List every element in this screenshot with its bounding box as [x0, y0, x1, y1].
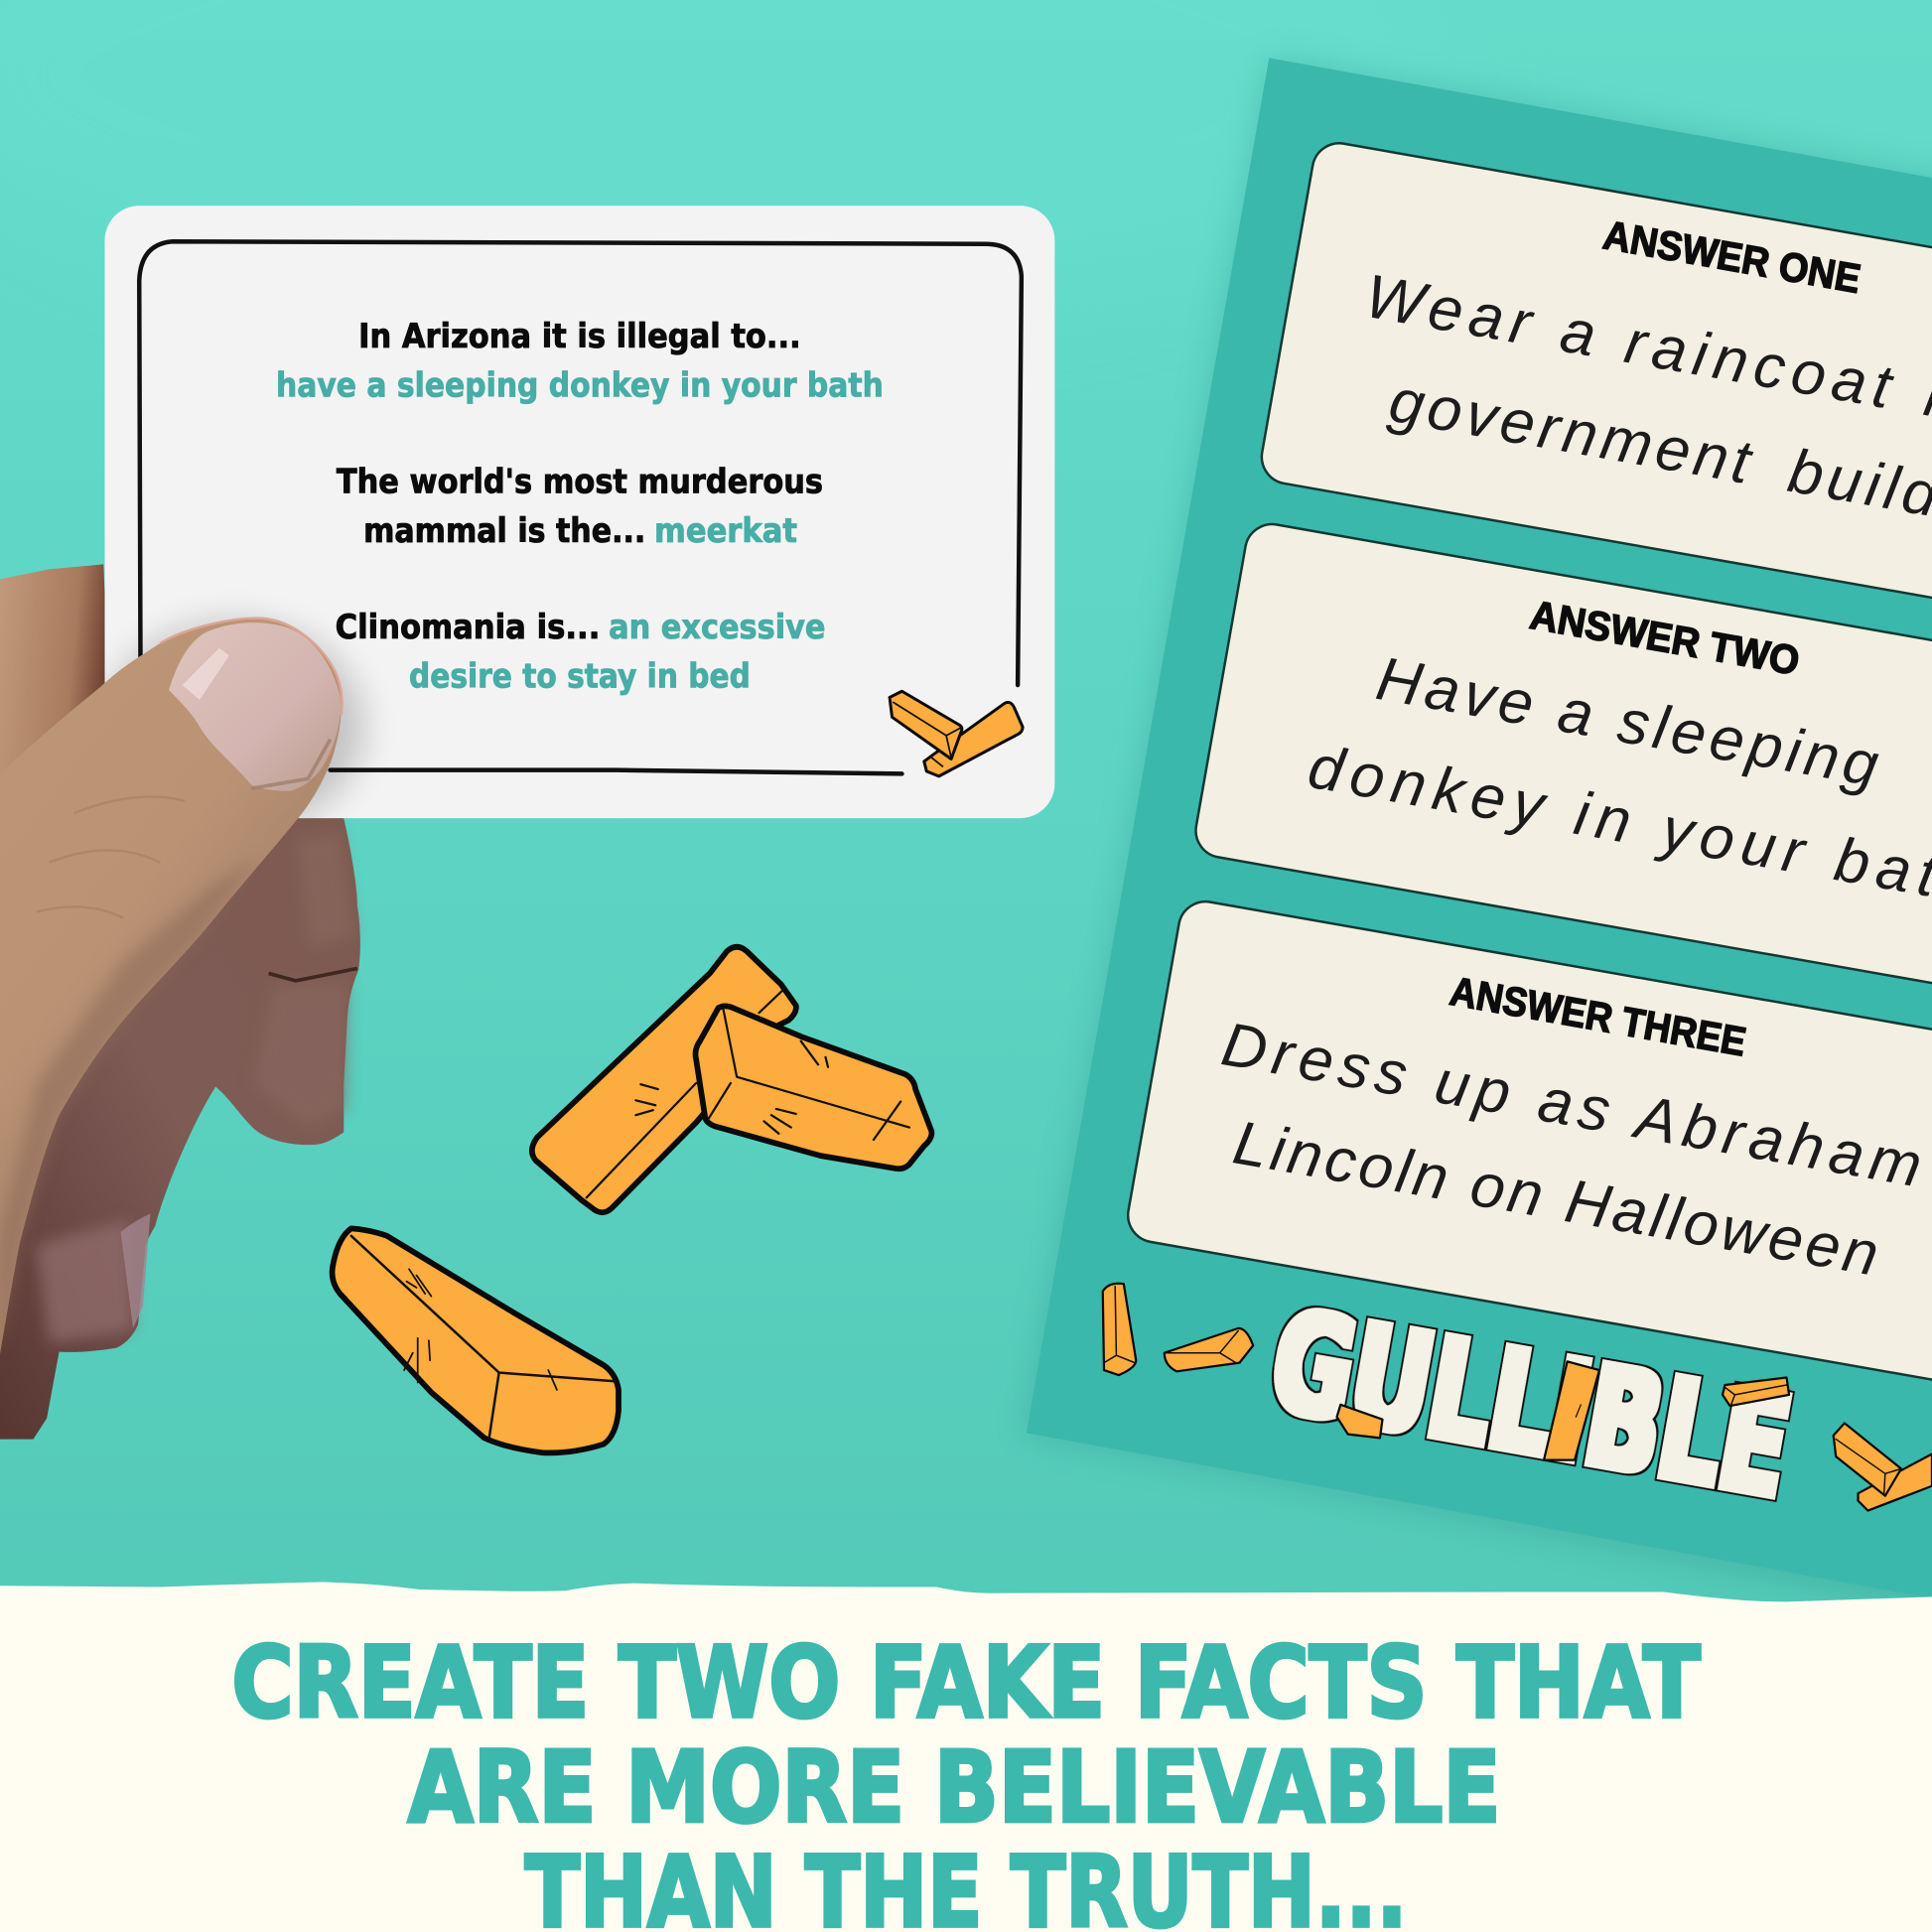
card fact three: an excessive: [609, 608, 826, 646]
card hand-drawn border: [139, 241, 1022, 773]
answer box one: ANSWER ONE: [1600, 211, 1863, 302]
answer box one: [1258, 139, 1932, 671]
answer box one: government: [1384, 366, 1758, 497]
answer box one: Wear a raincoat: [1360, 262, 1899, 423]
panel: answer sheet: [1027, 58, 1932, 1614]
card fact two: [337, 462, 823, 550]
bottom cream banner: [0, 1583, 1932, 1932]
answer box three: Dress up as Abraham: [1217, 1010, 1927, 1200]
card fact two: meerkat: [654, 511, 797, 550]
answer box three: Lincoln on Halloween: [1228, 1108, 1883, 1290]
headline: ARE MORE BELIEVABLE: [408, 1730, 1501, 1845]
hand: fingers behind the card: [0, 564, 360, 1440]
card fact three: [336, 608, 826, 696]
card fact three: desire to stay in bed: [409, 657, 751, 696]
card fact three: Clinomania is...: [336, 608, 600, 646]
card fact two: mammal is the...: [363, 511, 645, 550]
card fact one: [276, 317, 884, 405]
headline: CREATE TWO FAKE FACTS THAT: [231, 1626, 1701, 1740]
icon: chips at sheet corner: [1834, 1423, 1932, 1511]
hand: thumb holding the card: [0, 619, 342, 1354]
card fact one: have a sleeping donkey in your bath: [276, 366, 884, 405]
chips: large pair: [532, 947, 931, 1212]
headline: [231, 1626, 1701, 1932]
answer box two: ANSWER TWO: [1527, 592, 1803, 684]
icon: chips on logo letters: [1337, 1361, 1789, 1460]
answer box two: Have a sleeping: [1371, 644, 1883, 800]
chip: large lower: [333, 1228, 619, 1452]
answer box three: [1124, 897, 1932, 1430]
card fact one: In Arizona it is illegal to...: [358, 317, 801, 355]
thumb shadow on card: [104, 622, 363, 832]
answer box three: ANSWER THREE: [1447, 968, 1749, 1065]
panel: white question card: [104, 206, 1054, 832]
icon: sheet chips beside logo: [1103, 1284, 1253, 1375]
card fact two: The world's most murderous: [337, 462, 823, 500]
icon: two chips on card: [890, 691, 1023, 776]
answer box two: [1191, 520, 1932, 1045]
